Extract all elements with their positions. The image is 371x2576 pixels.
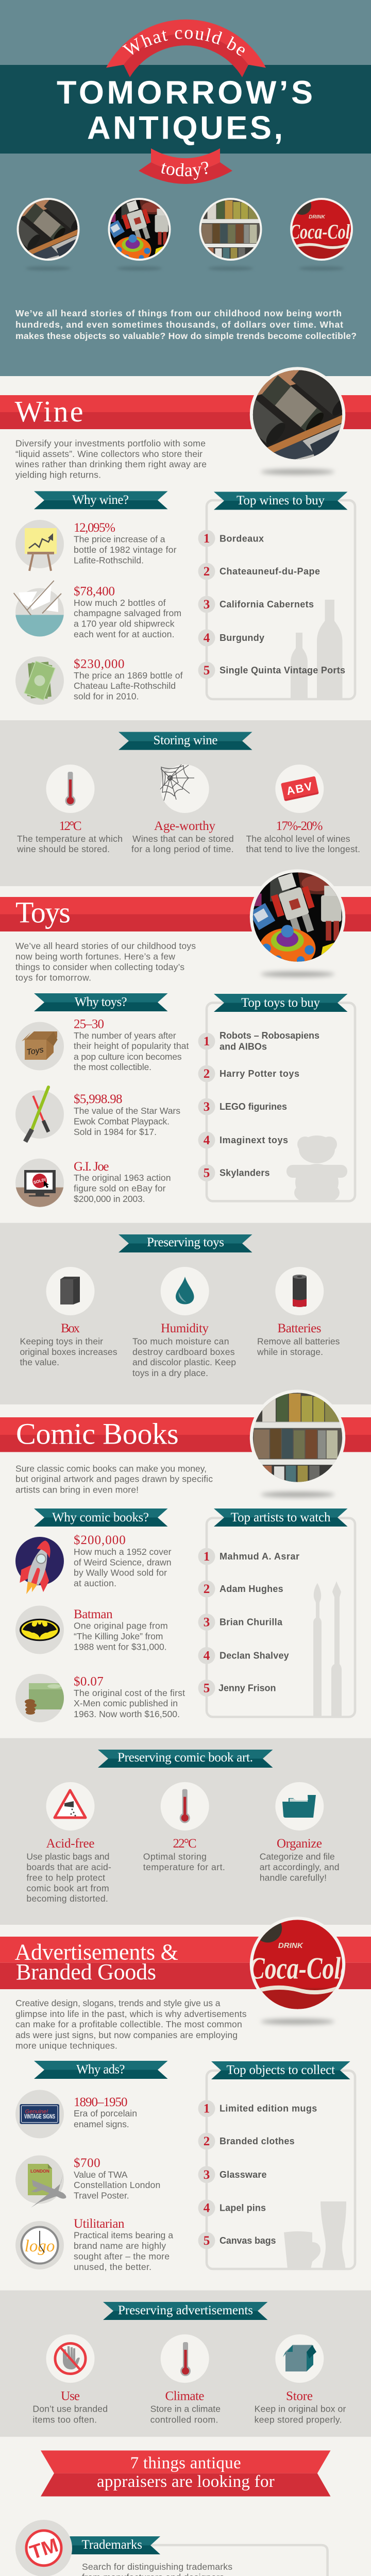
tip: organize: art accordingly, and xyxy=(260,1862,339,1872)
ribbon: top objects xyxy=(211,2061,350,2079)
list item 5 xyxy=(198,2232,276,2249)
ribbon: why wine: Why wine? xyxy=(72,493,129,507)
list item 4 xyxy=(198,1647,289,1664)
ads heading: Branded Goods xyxy=(16,1959,156,1985)
list item 3 xyxy=(198,596,314,613)
tip: 12C: wine should be stored. xyxy=(16,844,110,854)
list item 1: Limited edition mugs xyxy=(220,2104,317,2114)
bottom ribbon with "today?" xyxy=(139,148,232,184)
ribbon: preserving advertisements: Preserving advertisements xyxy=(118,2303,253,2317)
list item 4 xyxy=(198,2199,266,2216)
list item 4: 4 xyxy=(204,1133,210,1147)
list item 4 xyxy=(198,1131,288,1149)
ads intro text: more unique techniques. xyxy=(15,2040,117,2050)
stat: $78,400: a 170 year old shipwreck xyxy=(74,618,175,629)
list item 1: Bordeaux xyxy=(220,534,264,544)
wine intro text: Diversify your investments portfolio with some xyxy=(15,438,206,448)
panel: seven things appraisers xyxy=(15,2450,358,2576)
tip: 22C xyxy=(143,1782,225,1872)
tip: organize: Categorize and file xyxy=(260,1851,335,1861)
panel: storing wine xyxy=(0,720,371,886)
list item 3: 3 xyxy=(204,598,210,612)
photo: comic books xyxy=(199,198,262,270)
title line 2: ANTIQUES, xyxy=(87,110,283,146)
tip: climate: controlled room. xyxy=(150,2414,218,2425)
stat: 12,095%: Lafite-Rothschild. xyxy=(74,555,144,565)
list item 5: Single Quinta Vintage Ports xyxy=(220,665,345,675)
ads heading xyxy=(14,1939,178,1985)
tip: 17-20 percent: 17%-20% xyxy=(276,819,323,833)
ribbon: storing wine: Storing wine xyxy=(154,734,217,747)
tip: humidity: Too much moisture can xyxy=(132,1336,229,1346)
ribbon: preserving comic art: Preserving comic book art. xyxy=(117,1751,253,1765)
tip: acid-free: comic book art from xyxy=(26,1883,109,1893)
stat: $200,000: How much a 1952 cover xyxy=(74,1547,172,1557)
stat: 25-30: their height of popularity that xyxy=(74,1041,189,1051)
list item 3: California Cabernets xyxy=(220,599,314,609)
stat: 12,095%: 12,095% xyxy=(74,521,115,535)
stat: $200,000: $200,000 xyxy=(74,1533,126,1547)
panel: top objects list xyxy=(198,2061,355,2269)
tip: batteries: Batteries xyxy=(277,1321,322,1335)
list item 1: 1 xyxy=(204,532,210,546)
tip: age-worthy: Age-worthy xyxy=(154,819,215,833)
ribbon: why toys: Why toys? xyxy=(75,995,127,1009)
tip: acid-free: becoming distorted. xyxy=(26,1893,108,1904)
stat: utilitarian: logo xyxy=(25,2237,55,2256)
ribbon: why toys xyxy=(34,993,168,1011)
list item 4: Lapel pins xyxy=(220,2203,266,2213)
stat: $200,000: by Wally Wood sold for xyxy=(74,1568,167,1578)
tip: 22C: temperature for art. xyxy=(143,1862,225,1872)
toys header band xyxy=(0,897,371,931)
tip: acid-free: Acid-free xyxy=(46,1837,95,1851)
panel: hero background xyxy=(0,0,371,376)
wine photo xyxy=(222,362,352,474)
tip: use xyxy=(32,2334,108,2425)
toys intro text: things to consider when collecting today’s xyxy=(15,962,184,972)
tip: 17-20 percent: that tend to live the longest. xyxy=(246,844,360,854)
list item 3 xyxy=(198,2166,267,2183)
wine intro text: wines rather than drinking them right away are xyxy=(15,459,207,469)
stat: utilitarian: unused, the better. xyxy=(74,2262,151,2272)
comics photo xyxy=(250,1389,345,1497)
ads intro text: can make for a profitable collectible. The most common xyxy=(15,2019,242,2029)
stat: 1890-1950: Genuine! xyxy=(25,2109,48,2115)
photo: coca-cola sign xyxy=(290,196,358,270)
toys photo xyxy=(249,869,345,977)
list item 5: 5 xyxy=(204,2234,210,2248)
list frame xyxy=(207,1518,355,1717)
stat: 25-30 xyxy=(15,1017,189,1072)
comics header band xyxy=(0,1417,371,1452)
list item 2 xyxy=(198,1065,299,1082)
ads heading: Advertisements & xyxy=(14,1939,178,1964)
wine intro text xyxy=(15,438,207,480)
stat: $230,000: sold for in 2010. xyxy=(74,691,139,702)
tip: 22C: 22°C xyxy=(173,1837,197,1851)
brush and pen silhouettes xyxy=(313,1581,342,1717)
tip: box: Box xyxy=(61,1321,80,1335)
stat: $230,000: $230,000 xyxy=(74,657,125,671)
list item 4: 4 xyxy=(204,2201,210,2215)
stat: $0.07: $0.07 xyxy=(74,1675,104,1689)
stat: 25-30: Toys xyxy=(26,1045,44,1057)
tip: 17-20 percent: ABV xyxy=(285,779,314,798)
toys intro text: now being worth fortunes. Here’s a few xyxy=(15,952,175,962)
tip: box: the value. xyxy=(20,1357,59,1367)
top arch ribbon with "What could be" xyxy=(106,20,266,77)
tip: batteries: while in storage. xyxy=(257,1347,323,1357)
ads intro text: ads were just signs, but now companies are employing xyxy=(15,2030,238,2040)
tip: age-worthy xyxy=(131,765,234,854)
tip: age-worthy: Wines that can be stored xyxy=(132,834,234,844)
bottle silhouettes xyxy=(291,600,342,699)
stat: $200,000 xyxy=(14,1533,172,1600)
intro paragraph: hundreds, and even sometimes thousands, of dollars over time. What xyxy=(15,319,343,330)
ads intro text xyxy=(15,1998,247,2050)
ads intro text: Creative design, slogans, trends and style give us a xyxy=(15,1998,221,2008)
ribbon: why ads: Why ads? xyxy=(76,2063,125,2077)
stat: $0.07 xyxy=(15,1674,185,1722)
ribbon: top wines xyxy=(214,492,347,510)
step: trademarks: Search for distinguishing trademarks xyxy=(82,2562,232,2572)
stat: batman: Batman xyxy=(74,1607,113,1621)
stat: G.I. Joe: $200,000 in 2003. xyxy=(74,1194,145,1204)
toys intro text xyxy=(15,941,196,983)
intro paragraph: We’ve all heard stories of things from our childhood now being worth xyxy=(15,308,342,318)
stat: 1890-1950: enamel signs. xyxy=(74,2119,129,2129)
list item 4 xyxy=(198,630,264,646)
list item 3 xyxy=(198,1098,287,1115)
toys intro text: toys for tomorrow. xyxy=(15,973,91,983)
list item 4: 4 xyxy=(204,1649,210,1663)
photo: coca-cola sign: DRINK xyxy=(309,214,326,220)
stat: $0.07: The original cost of the first xyxy=(74,1688,185,1698)
stat: G.I. Joe xyxy=(14,1159,171,1208)
ads intro text: glimpse into life in the past, which is why advertisements xyxy=(15,2009,247,2019)
tip: 12C: 12°C xyxy=(59,819,81,833)
tip: use: Use xyxy=(61,2389,80,2403)
tip: organize xyxy=(260,1782,339,1883)
tip: acid-free: boards that are acid- xyxy=(26,1862,111,1872)
tip: store: keep stored properly. xyxy=(255,2414,342,2425)
tip: batteries xyxy=(257,1267,340,1357)
list item 1: and AIBOs xyxy=(220,1042,267,1052)
list item 5: 5 xyxy=(204,1166,210,1180)
wine intro text: “liquid assets”. Wine collectors who store their xyxy=(15,449,203,459)
tip: store xyxy=(255,2334,346,2425)
stat: 1890-1950 xyxy=(15,2090,137,2138)
tip: batteries: Remove all batteries xyxy=(257,1336,340,1346)
list item 1: 1 xyxy=(204,2102,210,2116)
tip: climate xyxy=(150,2334,221,2425)
stat: 12,095%: The price increase of a xyxy=(74,534,165,545)
stat: 1890-1950: 1890–1950 xyxy=(74,2095,128,2109)
ribbon: top toys: Top toys to buy xyxy=(241,996,321,1010)
list item 3: 3 xyxy=(204,1616,210,1629)
panel: preserving advertisements xyxy=(0,2291,371,2437)
list item 4: Burgundy xyxy=(220,633,264,643)
list item 1 xyxy=(198,1030,319,1052)
stat: $5,998.98: Ewok Combat Playpack. xyxy=(74,1116,170,1126)
list item 1: Robots – Robosapiens xyxy=(220,1030,319,1041)
list item 5: 5 xyxy=(204,1682,210,1695)
tip: organize: handle carefully! xyxy=(260,1872,327,1883)
stat: $230,000: Chateau Lafte-Rothschild xyxy=(74,681,176,691)
flow connector lines xyxy=(44,2545,328,2576)
stat: $78,400: How much 2 bottles of xyxy=(74,598,166,608)
tip: age-worthy: for a long period of time. xyxy=(131,844,234,854)
list item 3: 3 xyxy=(204,1100,210,1114)
stat: $700: Value of TWA xyxy=(74,2170,128,2180)
ribbon: top artists xyxy=(214,1509,347,1527)
list item 1 xyxy=(198,2100,317,2117)
list item 5: 5 xyxy=(204,664,210,677)
stat: utilitarian xyxy=(15,2217,173,2272)
list item 2: 2 xyxy=(204,1582,210,1596)
tip: humidity: toys in a dry place. xyxy=(132,1368,208,1378)
grey background xyxy=(0,1223,371,1404)
grey background xyxy=(0,720,371,886)
ribbon: top wines: Top wines to buy xyxy=(237,494,325,507)
list item 2: Harry Potter toys xyxy=(220,1069,299,1079)
list item 1 xyxy=(198,530,264,547)
step: trademarks: Trademarks xyxy=(81,2538,142,2552)
tip: box xyxy=(20,1267,117,1367)
red banner heading xyxy=(41,2450,331,2497)
stat: batman: One original page from xyxy=(74,1621,168,1631)
ribbon: why ads xyxy=(34,2061,168,2079)
stat: $700: $700 xyxy=(74,2156,100,2170)
list item 2: 2 xyxy=(204,2134,210,2148)
panel: preserving toys xyxy=(0,1223,371,1404)
list frame xyxy=(207,2071,355,2269)
toys heading: Toys xyxy=(15,895,71,929)
toys intro text: We’ve all heard stories of our childhood toys xyxy=(15,941,196,951)
stat: $700: Constellation London xyxy=(74,2180,160,2190)
wine intro text: yielding high returns. xyxy=(15,470,101,480)
ribbon: top objects: Top objects to collect xyxy=(227,2063,335,2077)
stat: $78,400: each went for at auction. xyxy=(74,629,174,639)
list item 3: 3 xyxy=(204,2168,210,2182)
stat: $230,000 xyxy=(15,656,183,705)
stat: $78,400: champagne salvaged from xyxy=(74,608,181,618)
stat: $700 xyxy=(15,2156,160,2208)
list item 5: Jenny Frison xyxy=(218,1683,276,1693)
stat: batman: 1988 went for $31,000. xyxy=(74,1641,167,1652)
stat: G.I. Joe: SOLD! xyxy=(33,1177,46,1185)
tip: box: original boxes increases xyxy=(20,1347,117,1357)
stat: utilitarian: Practical items bearing a xyxy=(74,2230,173,2241)
ribbon: preserving toys: Preserving toys xyxy=(147,1235,224,1249)
comics intro text: Sure classic comic books can make you money, xyxy=(15,1463,207,1473)
comics intro text xyxy=(15,1463,213,1495)
stat: $5,998.98: $5,998.98 xyxy=(74,1092,123,1106)
wine header band xyxy=(0,395,371,429)
grey background xyxy=(0,2291,371,2437)
photo: wine bottles xyxy=(0,195,84,270)
teddy bear silhouette xyxy=(286,1136,347,1201)
list item 1 xyxy=(198,1548,299,1565)
stat: $5,998.98: Sold in 1984 for $17. xyxy=(74,1127,157,1137)
tip: 22C: Optimal storing xyxy=(143,1851,207,1861)
panel: comic books section xyxy=(0,1389,371,1722)
comics intro text: but original artwork and pages drawn by specific xyxy=(15,1474,213,1484)
tip: humidity: Humidity xyxy=(161,1321,209,1335)
title line 1: TOMORROW’S xyxy=(57,75,313,111)
stat: 1890-1950: VINTAGE SIGNS xyxy=(24,2114,55,2120)
stat: 25-30: the most collectible. xyxy=(74,1062,151,1072)
panel: top toys list xyxy=(198,994,355,1201)
list item 5: Canvas bags xyxy=(220,2235,276,2246)
stat: utilitarian: brand name are highly xyxy=(74,2241,166,2251)
tip: 17-20 percent xyxy=(246,765,360,854)
list item 1: Mahmud A. Asrar xyxy=(220,1551,299,1562)
list item 3: Brian Churilla xyxy=(220,1617,283,1627)
list item 2: 2 xyxy=(204,565,210,579)
tip: humidity: destroy cardboard boxes xyxy=(132,1347,235,1357)
photo: vintage toys xyxy=(107,198,171,270)
panel: top wines list xyxy=(198,492,355,699)
list item 3 xyxy=(198,1614,283,1631)
stat: $0.07: X-Men comic published in xyxy=(74,1698,178,1708)
stat: 1890-1950: Era of porcelain xyxy=(74,2108,137,2119)
bottom ribbon with "today?": today? xyxy=(161,162,208,180)
list item 4: 4 xyxy=(204,631,210,645)
stat: 12,095%: bottle of 1982 vintage for xyxy=(74,545,177,555)
grey background xyxy=(0,1738,371,1925)
tip: store: Store xyxy=(286,2389,313,2403)
stat: $230,000: The price an 1869 bottle of xyxy=(74,670,183,681)
stat: $700: Travel Poster. xyxy=(74,2191,129,2201)
ribbon: storing wine xyxy=(119,732,252,750)
title band xyxy=(0,65,371,154)
panel: toys section xyxy=(0,869,371,1208)
tip: 12C: The temperature at which xyxy=(17,834,123,844)
list item 2: Chateauneuf-du-Pape xyxy=(220,566,320,577)
stat: G.I. Joe: The original 1963 action xyxy=(74,1173,171,1183)
stat: $200,000: at auction. xyxy=(74,1578,116,1588)
list item 5 xyxy=(198,662,345,679)
ribbon: why comic books: Why comic books? xyxy=(52,1511,149,1524)
stat: G.I. Joe: G.I. Joe xyxy=(74,1160,109,1174)
list frame xyxy=(207,500,355,699)
coca-cola photo: DRINK xyxy=(278,1941,303,1950)
tip: climate: Store in a climate xyxy=(150,2404,221,2414)
list item 4: Declan Shalvey xyxy=(220,1650,289,1660)
tip: 17-20 percent: The alcohol level of wines xyxy=(246,834,350,844)
stat: utilitarian: sought after – the more xyxy=(74,2251,170,2262)
stat: 25-30: 25–30 xyxy=(74,1017,104,1031)
stat: batman xyxy=(15,1605,168,1654)
tip: 12C xyxy=(16,765,123,854)
tip: acid-free xyxy=(26,1782,111,1904)
ribbon: preserving comic art xyxy=(98,1750,273,1768)
tip: humidity: and discolor plastic. Keep xyxy=(132,1357,236,1367)
panel: wine section xyxy=(0,362,371,705)
list frame xyxy=(207,1003,355,1201)
ribbon: preserving toys xyxy=(119,1234,252,1252)
step: trademarks: TM xyxy=(27,2534,61,2564)
step: trademarks xyxy=(15,2520,232,2576)
stat: batman: “The Killing Joke” from xyxy=(74,1631,163,1641)
list item 5: Skylanders xyxy=(220,1167,270,1178)
list item 5 xyxy=(198,1164,270,1181)
stat: $700: LONDON xyxy=(30,2168,49,2174)
stat: 12,095% xyxy=(15,520,177,571)
panel: top artists list xyxy=(198,1509,355,1717)
ribbon: top artists: Top artists to watch xyxy=(231,1511,331,1524)
list item 2 xyxy=(198,1581,283,1597)
stat: G.I. Joe: figure sold on eBay for xyxy=(74,1183,166,1194)
tip: acid-free: free to help protect xyxy=(26,1872,105,1883)
stat: $78,400: $78,400 xyxy=(74,584,115,598)
top arch ribbon with "What could be": What could be xyxy=(122,28,245,56)
tip: use: items too often. xyxy=(32,2414,97,2425)
tip: acid-free: Use plastic bags and xyxy=(26,1851,109,1861)
ribbon: why wine xyxy=(34,491,168,509)
red banner heading: 7 things antique xyxy=(130,2454,241,2472)
ads header band xyxy=(0,1937,371,1989)
ribbon: preserving advertisements xyxy=(103,2302,267,2320)
list item 2: Branded clothes xyxy=(220,2136,295,2146)
list item 2 xyxy=(198,563,320,580)
coca-cola photo xyxy=(249,1914,352,2024)
panel: advertisements section xyxy=(0,1914,371,2272)
stat: $5,998.98 xyxy=(15,1087,180,1142)
red banner heading: appraisers are looking for xyxy=(97,2472,275,2491)
ribbon: why comic books xyxy=(34,1509,168,1527)
tip: climate: Climate xyxy=(165,2389,204,2403)
tip: store: Keep in original box or xyxy=(255,2404,346,2414)
list item 3: LEGO figurines xyxy=(220,1101,287,1112)
stat: 25-30: The number of years after xyxy=(74,1030,176,1041)
tip: humidity xyxy=(132,1267,236,1378)
tip: use: Don’t use branded xyxy=(32,2404,108,2414)
panel: preserving comic book art xyxy=(0,1738,371,1925)
tip: box: Keeping toys in their xyxy=(20,1336,103,1346)
list item 2 xyxy=(198,2133,295,2149)
stat: $200,000: of Weird Science, drawn xyxy=(74,1557,171,1567)
intro paragraph xyxy=(15,308,357,341)
comics intro text: artists can bring in even more! xyxy=(15,1484,139,1495)
stat: $78,400 xyxy=(14,581,181,641)
list item 4: Imaginext toys xyxy=(220,1135,288,1145)
intro paragraph: makes these objects so valuable? How do simple trends become collectible? xyxy=(15,331,357,341)
comics heading: Comic Books xyxy=(16,1417,179,1451)
stat: 25-30: a pop culture icon becomes xyxy=(74,1052,182,1062)
list item 1: 1 xyxy=(204,1035,210,1048)
stat: $5,998.98: The value of the Star Wars xyxy=(74,1106,180,1116)
list item 2: Adam Hughes xyxy=(220,1584,283,1594)
list item 1: 1 xyxy=(204,1550,210,1564)
ribbon: top toys xyxy=(214,994,347,1012)
list item 5 xyxy=(198,1680,276,1697)
list item 3: Glassware xyxy=(220,2170,267,2180)
tip: organize: Organize xyxy=(277,1837,322,1851)
list item 2: 2 xyxy=(204,1067,210,1081)
stat: utilitarian: Utilitarian xyxy=(74,2217,125,2231)
mug and glass silhouettes xyxy=(284,2201,346,2269)
stat: $0.07: 1963. Now worth $16,500. xyxy=(74,1709,180,1719)
photo row xyxy=(0,195,358,270)
wine heading: Wine xyxy=(14,395,83,428)
